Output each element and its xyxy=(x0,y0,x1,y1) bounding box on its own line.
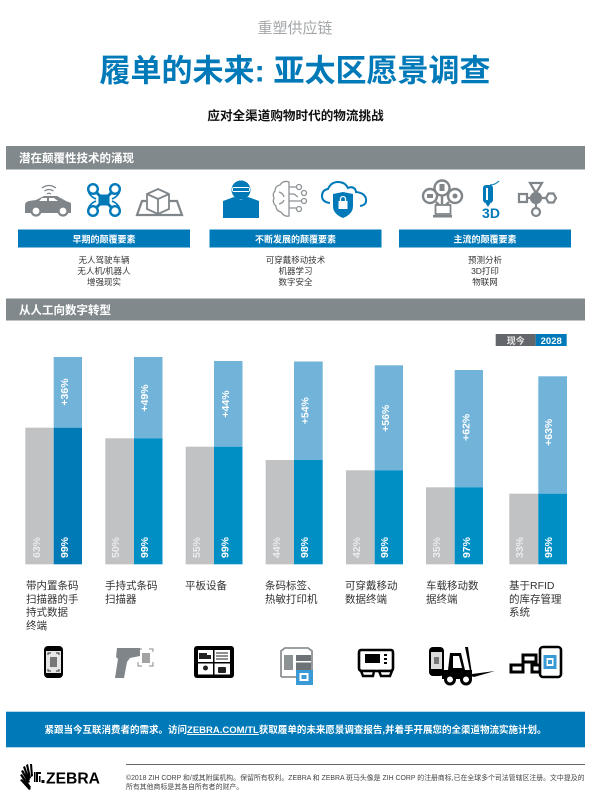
label: handheld scanner: 扫描器 xyxy=(105,592,137,605)
category: early disruptors: 增强现实 xyxy=(87,277,121,287)
category: mainstream disruptors: 预测分析 xyxy=(468,255,502,265)
bar group: tablet xyxy=(186,361,242,564)
footer xyxy=(20,764,585,791)
bar group: wearable terminal: 98% xyxy=(379,536,391,558)
bar group: vehicle terminal xyxy=(426,370,483,564)
subtitle: 应对全渠道购物时代的物流挑战 xyxy=(207,108,384,123)
call to action xyxy=(6,712,585,747)
panel: emerging technologies xyxy=(6,146,585,287)
bar group: label printer: 44% xyxy=(271,536,283,558)
legend: 2028 xyxy=(541,336,562,347)
label: vehicle terminal xyxy=(426,579,479,605)
bar group: wearable terminal: +56% xyxy=(380,404,392,432)
legend: 现今 xyxy=(507,335,525,346)
category: mainstream disruptors: 物联网 xyxy=(472,277,498,287)
label: wearable terminal: 数据终端 xyxy=(345,592,387,605)
label: wearable terminal xyxy=(345,579,398,605)
icon: handheld terminal xyxy=(44,646,63,678)
label: tablet: 平板设备 xyxy=(185,579,227,592)
panel: digital transformation xyxy=(6,298,585,685)
label: label printer xyxy=(265,579,318,605)
label: vehicle terminal: 车载移动数 xyxy=(426,579,479,592)
bar group: handheld with built-in scanner xyxy=(25,357,82,564)
category: early disruptors: 无人驾驶车辆 xyxy=(78,255,130,265)
copyright xyxy=(126,773,585,791)
bar group: label printer xyxy=(266,362,323,564)
call to action: 紧跟当今互联消费者的需求。访问ZEBRA.COM/TL获取履单的未来愿景调查报告,并着手开展您的全渠道物流实施计划。 xyxy=(45,724,546,736)
copyright: ©2018 ZIH CORP 和/或其附属机构。保留所有权利。ZEBRA 和 ZEBRA 斑马头像是 ZIH CORP 的注册商标,已在全球多个司法管辖区注册。文中提及的 xyxy=(126,773,585,782)
bar group: handheld scanner xyxy=(105,357,162,564)
category: mainstream disruptors xyxy=(399,230,571,287)
bar group: label printer: +54% xyxy=(300,396,312,424)
bar group: handheld with built-in scanner: +36% xyxy=(59,378,71,406)
icon: predictive analytics xyxy=(423,180,462,218)
icon: forklift with terminal xyxy=(429,647,495,684)
bar group: handheld with built-in scanner: 63% xyxy=(31,536,43,558)
icon: label printer xyxy=(281,648,313,685)
bar group: RFID inventory xyxy=(509,376,567,564)
category: evolving disruptors xyxy=(210,230,382,287)
bar group: wearable terminal: 42% xyxy=(351,536,363,558)
category: early disruptors: 早期的颠覆要素 xyxy=(72,234,136,244)
icon: RFID inventory xyxy=(511,647,561,677)
label: RFID inventory: 基于RFID xyxy=(509,579,555,592)
bar group: tablet: +44% xyxy=(220,390,232,418)
icon: wearable glasses terminal xyxy=(359,650,393,676)
category: evolving disruptors: 可穿戴移动技术 xyxy=(266,255,326,265)
bar group: handheld with built-in scanner: 99% xyxy=(59,536,71,558)
bar group: handheld scanner: 99% xyxy=(139,536,151,558)
icon: internet of things xyxy=(519,183,556,216)
title: 履单的未来: 亚太区愿景调查 xyxy=(100,54,490,88)
bar group: tablet: 99% xyxy=(220,536,232,558)
heading: digital transformation: 从人工向数字转型 xyxy=(19,303,111,317)
bar group: handheld scanner: +49% xyxy=(139,384,151,412)
icon: barcode scanner gun xyxy=(115,648,153,678)
bar group: RFID inventory: +63% xyxy=(543,418,555,446)
bar group: wearable terminal xyxy=(346,365,403,564)
category: early disruptors xyxy=(18,230,190,287)
icon: 3D printing xyxy=(482,181,500,221)
icon: person with wearable glasses xyxy=(223,180,259,218)
category: evolving disruptors: 机器学习 xyxy=(278,266,313,276)
bar group: vehicle terminal: 35% xyxy=(431,536,443,558)
label: handheld scanner xyxy=(105,579,158,605)
category: evolving disruptors: 不断发展的颠覆要素 xyxy=(255,234,336,244)
label: handheld with built-in scanner: 持式数据 xyxy=(26,606,68,619)
label: handheld with built-in scanner: 终端 xyxy=(26,619,47,632)
copyright: 所有其他商标是其各自所有者的财产。 xyxy=(126,782,243,791)
label: handheld with built-in scanner xyxy=(26,579,78,632)
label: RFID inventory: 系统 xyxy=(509,606,530,619)
label: label printer: 条码标签、 xyxy=(265,579,318,592)
label: label printer: 热敏打印机 xyxy=(265,592,318,605)
bar group: RFID inventory: 33% xyxy=(514,536,526,558)
bar group: vehicle terminal: +62% xyxy=(461,413,473,441)
label: RFID inventory: 的库存管理 xyxy=(509,592,562,605)
bar group: tablet: 55% xyxy=(191,536,203,558)
icon: cloud security xyxy=(322,182,366,218)
bar group: label printer: 98% xyxy=(299,536,311,558)
icon: drone xyxy=(88,184,120,216)
logo: Zebra xyxy=(20,764,100,790)
bar group: handheld scanner: 50% xyxy=(110,536,122,558)
label: handheld scanner: 手持式条码 xyxy=(105,579,158,592)
label: handheld with built-in scanner: 带内置条码 xyxy=(26,579,78,592)
category: early disruptors: 无人机/机器人 xyxy=(77,266,131,276)
label: wearable terminal: 可穿戴移动 xyxy=(345,579,398,592)
icon: tablet xyxy=(194,646,234,678)
logo: Zebra: ZEBRA xyxy=(46,770,100,788)
legend xyxy=(496,334,567,347)
icon: 3D printing: 3D xyxy=(482,205,500,221)
label: handheld with built-in scanner: 扫描器的手 xyxy=(26,592,78,605)
label: vehicle terminal: 据终端 xyxy=(426,592,458,605)
heading: emerging technologies: 潜在颠覆性技术的涌现 xyxy=(19,151,134,165)
icon: connected car xyxy=(25,186,71,216)
category: evolving disruptors: 数字安全 xyxy=(278,277,313,287)
footer rule xyxy=(126,764,585,765)
icon: augmented reality cube xyxy=(137,189,182,215)
kicker: 重塑供应链 xyxy=(257,19,333,37)
category: mainstream disruptors: 3D打印 xyxy=(471,266,499,276)
label: RFID inventory xyxy=(509,579,562,619)
heading: emerging technologies xyxy=(6,146,585,170)
bar group: vehicle terminal: 97% xyxy=(461,536,473,558)
category: mainstream disruptors: 主流的颠覆要素 xyxy=(453,234,517,244)
icon: machine learning brain xyxy=(273,181,306,216)
bar group: RFID inventory: 95% xyxy=(543,536,555,558)
heading: digital transformation xyxy=(6,298,585,320)
